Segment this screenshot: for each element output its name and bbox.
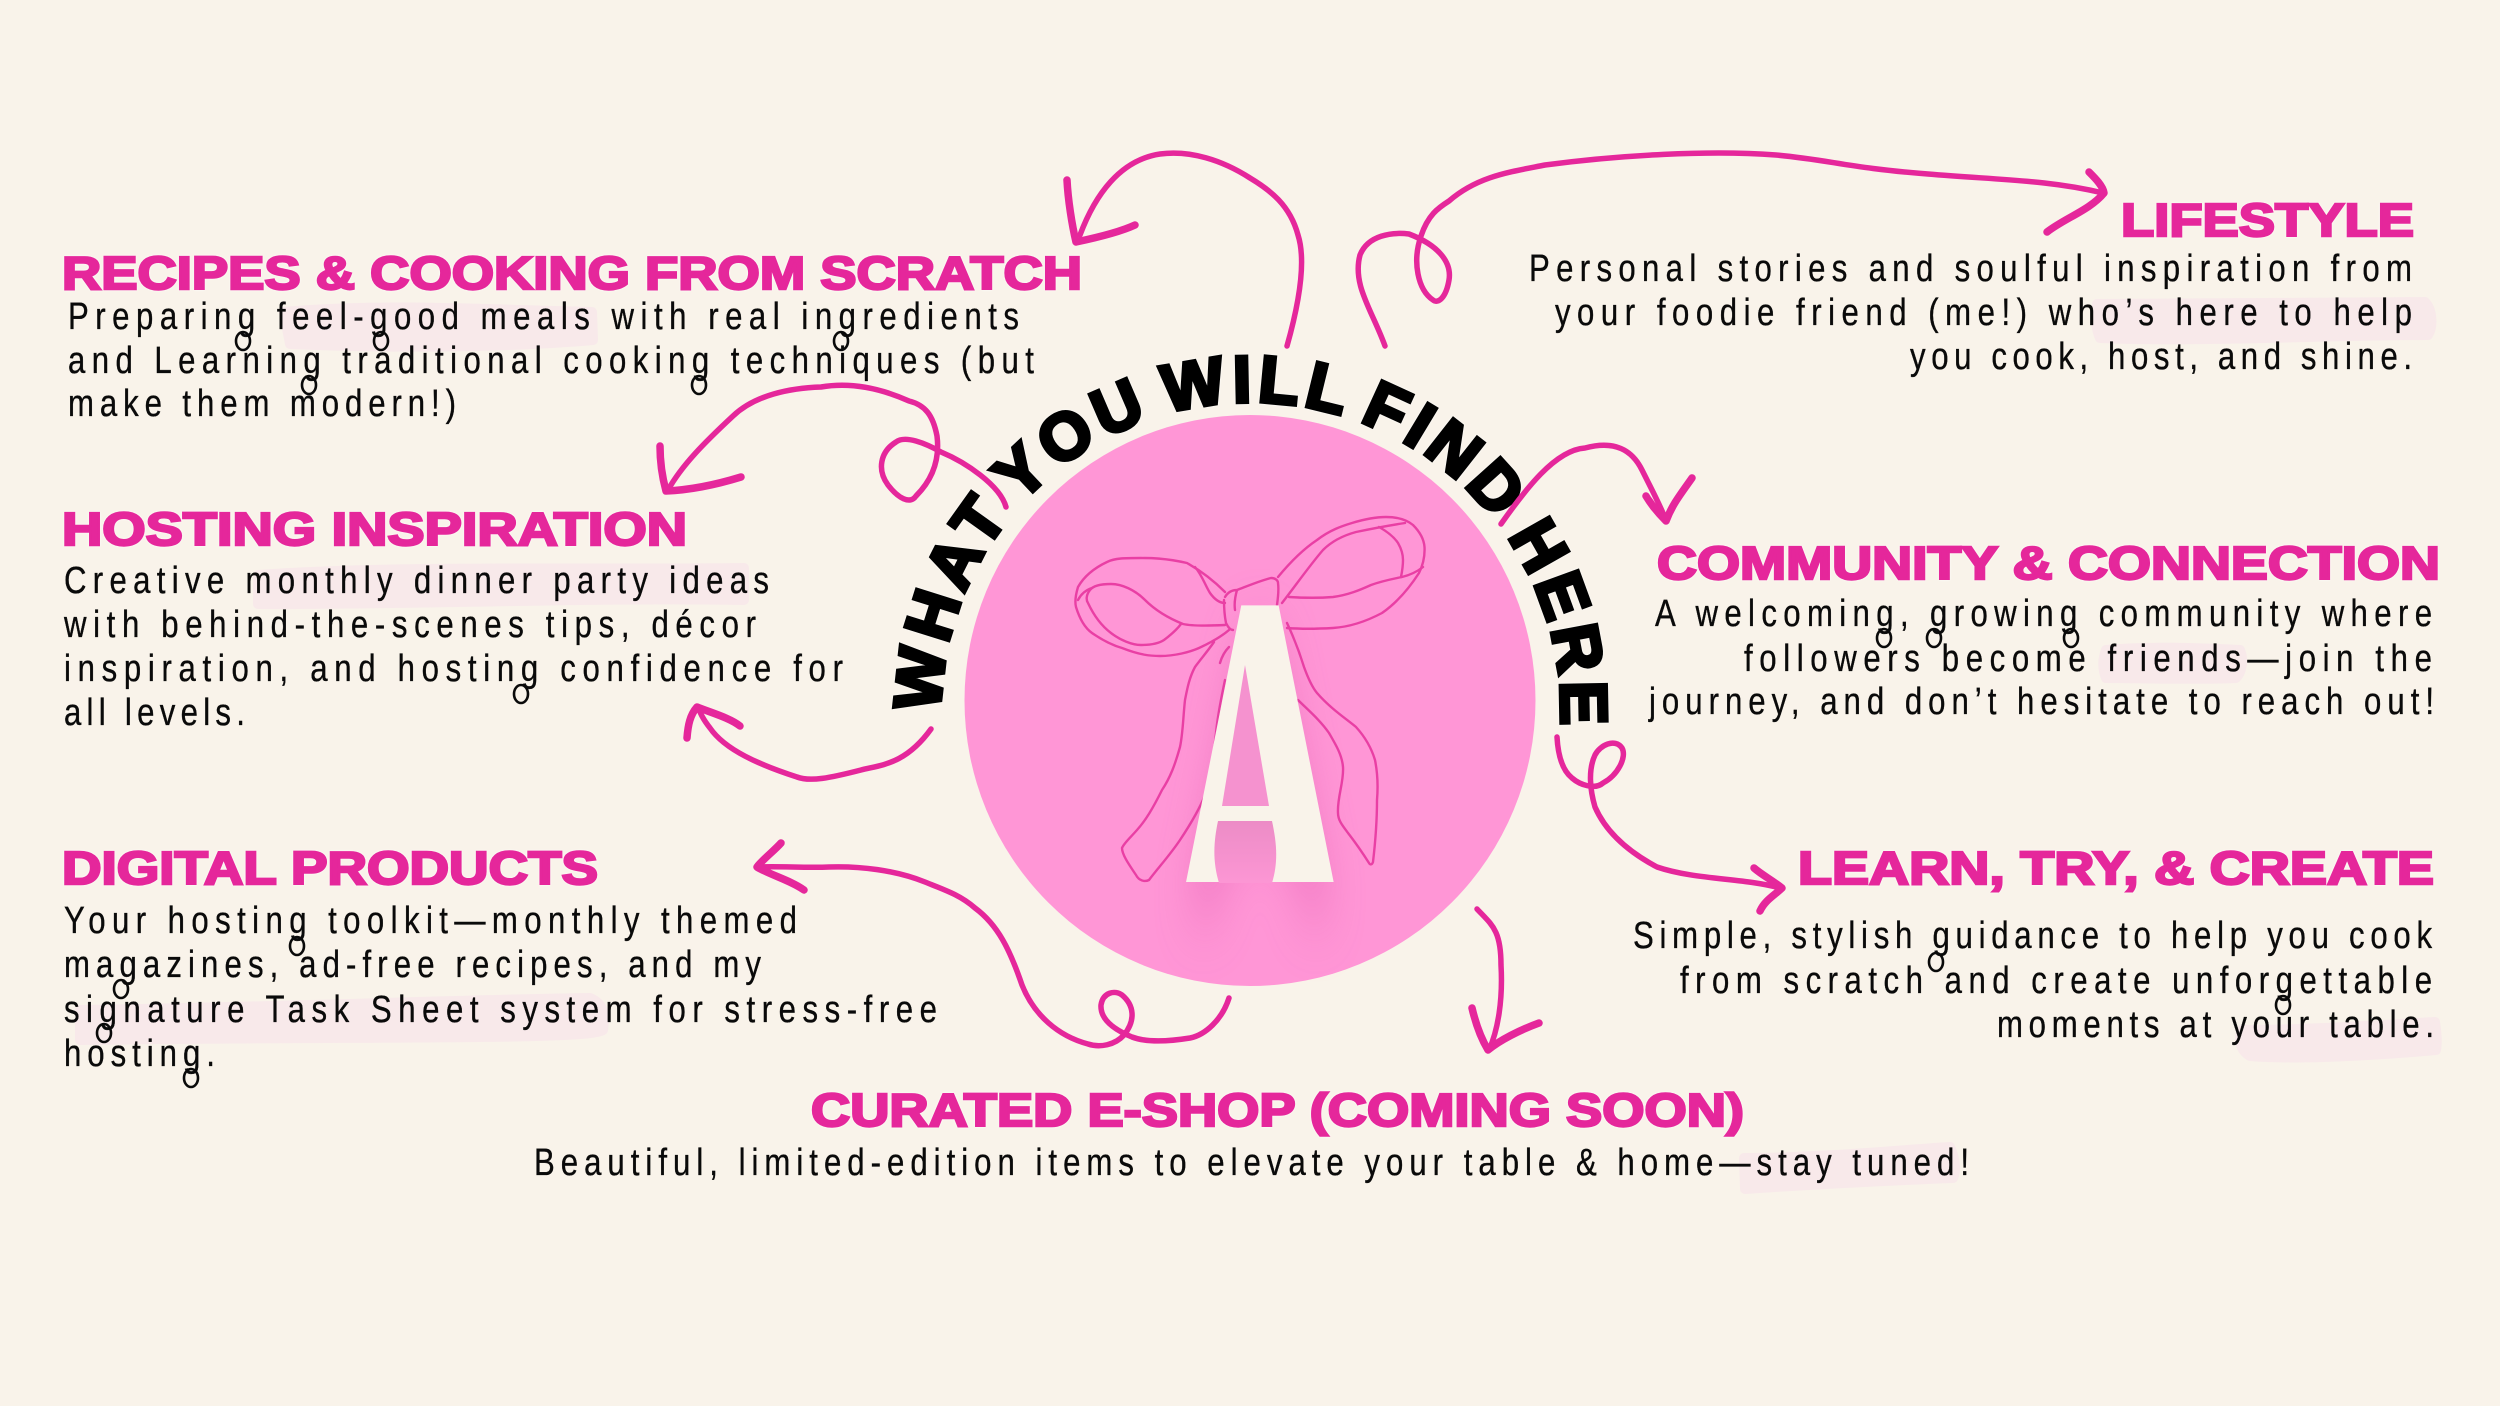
icon: ribbon bow — [1075, 517, 1425, 881]
body text: recipes: make them modern!) — [68, 383, 456, 425]
body text: hosting — [63, 560, 843, 734]
arrow: to community — [1501, 445, 1692, 524]
body text: recipes — [68, 296, 1034, 425]
heading: community and connection: COMMUNITY & CONNECTION — [1657, 537, 2440, 589]
body text: recipes: and Learning traditional cooking techniques (but — [68, 340, 1034, 382]
heading: recipes and cooking: RECIPES & COOKING FROM SCRATCH — [62, 247, 1082, 299]
body text: learn: Simple, stylish guidance to help you cook — [1633, 915, 2433, 957]
highlight: friends — [2103, 648, 2242, 679]
highlight: here to help — [2096, 302, 2431, 339]
heading: learn, try and create: LEARN, TRY, & CREATE — [1798, 842, 2434, 894]
body text: community: followers become friends—join the — [1744, 638, 2432, 680]
panel: hosting inspiration — [62, 503, 843, 734]
body text: hosting: all levels. — [64, 692, 245, 734]
body text: digital products: Your hosting toolkit—monthly themed — [64, 900, 797, 942]
heading: digital products: DIGITAL PRODUCTS — [62, 842, 598, 894]
panel: digital products — [62, 842, 937, 1075]
arrow: to digital products — [757, 843, 1229, 1046]
body text: community: A welcoming, growing community where — [1655, 593, 2432, 635]
heading: curated e-shop: CURATED E-SHOP (COMING SOON) — [811, 1084, 1744, 1136]
body text: hosting: with behind-the-scenes tips, décor — [63, 604, 756, 646]
panel: curated e-shop — [534, 1084, 1969, 1189]
arrow: to lifestyle — [1358, 153, 2104, 346]
body text: hosting: inspiration, and hosting confidence for — [64, 648, 843, 690]
body text: lifestyle — [1529, 248, 2412, 378]
body text: community: journey, and don’t hesitate to reach out! — [1648, 681, 2434, 723]
body text: lifestyle: you cook, host, and shine. — [1910, 336, 2412, 378]
body text: recipes: Preparing feel-good meals with real ingredients — [68, 296, 1019, 338]
body text: lifestyle: Personal stories and soulful inspiration from — [1529, 248, 2412, 290]
panel: lifestyle — [1529, 194, 2431, 378]
body text: lifestyle: your foodie friend (me!) who’s here to help — [1555, 292, 2412, 334]
panel: learn, try and create — [1633, 842, 2437, 1057]
body text: digital products: magazines, ad-free recipes, and my — [64, 944, 762, 986]
heading: hosting inspiration: HOSTING INSPIRATION — [62, 503, 687, 555]
body text: e-shop: Beautiful, limited-edition items to elevate your table & home—stay tuned! — [534, 1142, 1969, 1184]
script g loops — [97, 332, 2290, 1087]
highlight: stay tuned — [1744, 1147, 1955, 1189]
body text: learn: from scratch and create unforgettable — [1680, 960, 2432, 1002]
body text: digital products: signature Task Sheet system for stress-free — [64, 989, 937, 1031]
highlight: feel-good meals — [284, 308, 593, 347]
heading: lifestyle: LIFESTYLE — [2121, 194, 2414, 246]
body text: digital products: hosting. — [64, 1033, 215, 1075]
body text: learn: moments at your table. — [1997, 1004, 2434, 1046]
logo letter A: A — [1181, 519, 1339, 968]
highlight: your table — [2240, 1022, 2437, 1057]
arrow: to hosting inspiration from above — [660, 385, 1006, 507]
curved title: what you will find here: WHAT YOU WILL FIND HERE — [892, 354, 1609, 725]
arrow: to learn, try and create — [1557, 737, 1782, 911]
arrow: to recipes — [1067, 153, 1302, 346]
highlight: signature task sheet system — [80, 998, 604, 1040]
panel: recipes and cooking from scratch — [62, 247, 1082, 425]
central pink circle — [964, 415, 1536, 986]
body text: community — [1648, 593, 2434, 723]
highlight: monthly dinner party — [258, 568, 744, 604]
body text: hosting: Creative monthly dinner party ideas — [64, 560, 769, 602]
panel: community and connection — [1648, 537, 2440, 723]
body text: digital products — [64, 900, 937, 1075]
arrow: to hosting inspiration from below — [687, 707, 931, 779]
body text: learn — [1633, 915, 2434, 1046]
arrow: to e-shop — [1472, 909, 1539, 1050]
